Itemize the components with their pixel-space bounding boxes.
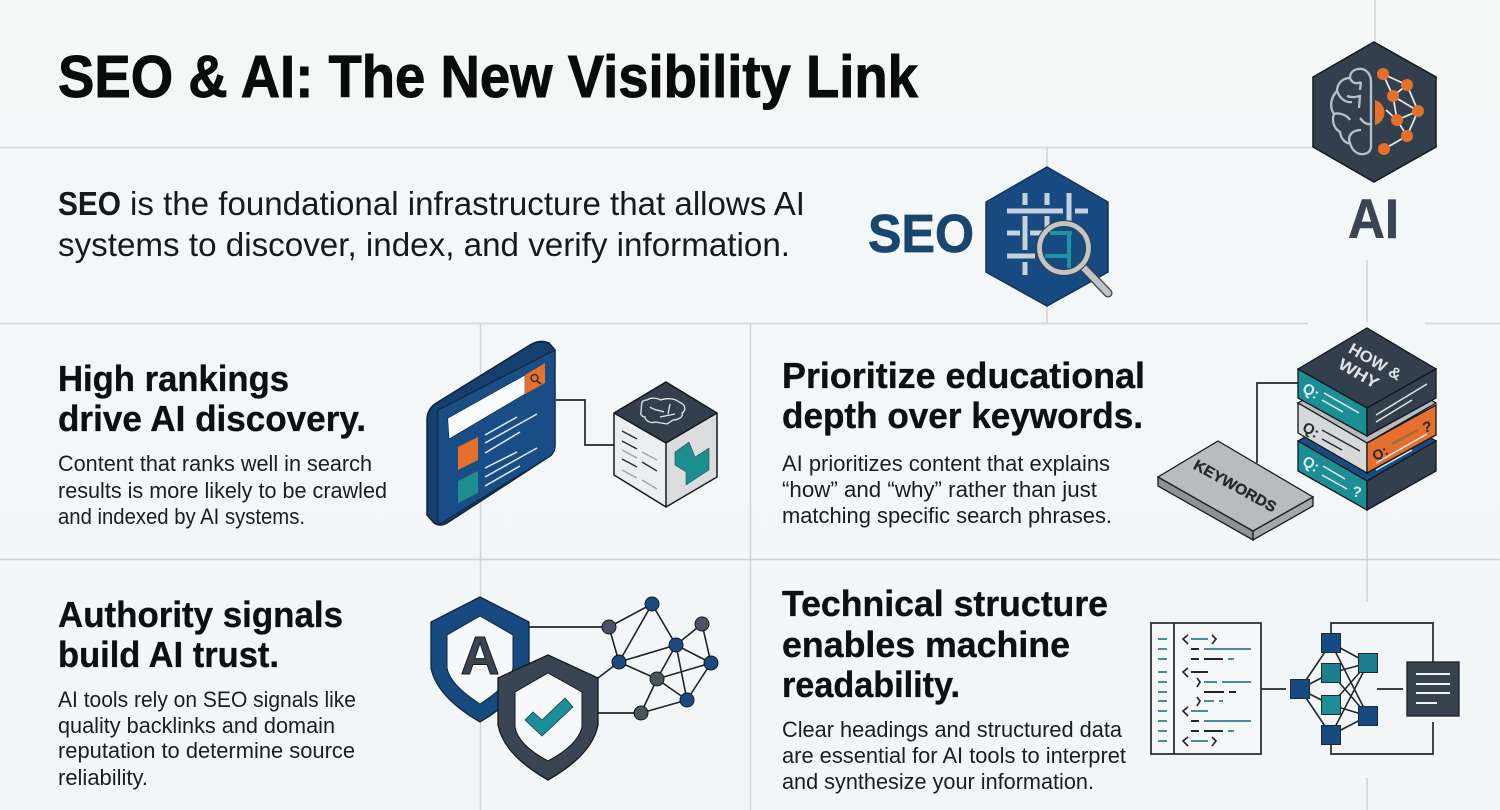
- text block: educational depth: [782, 451, 1112, 528]
- icon: output document: [1407, 662, 1459, 716]
- icon: question stack: ?: [1421, 418, 1433, 437]
- heading: educational depth: [782, 355, 1145, 436]
- AI label: AI: [1348, 187, 1399, 250]
- text block: authority signals: AI tools rely on SEO signals like: [58, 687, 356, 712]
- heading: technical structure: [782, 583, 1108, 705]
- text block: high rankings: results is more likely to be crawled: [58, 478, 387, 503]
- panel: high rankings: [58, 341, 717, 529]
- icon: question stack: Q:: [1299, 419, 1322, 442]
- icon: question stack: [1298, 328, 1436, 510]
- text block: definition: is the foundational infrastructure that allows AI: [130, 185, 805, 222]
- icon: check shield: [498, 655, 598, 780]
- text block: authority signals: reputation to determine source: [58, 738, 355, 763]
- heading: high rankings: [58, 358, 366, 439]
- heading: technical structure: Technical structure: [782, 583, 1108, 624]
- text block: high rankings: [58, 451, 387, 529]
- icon: keywords slab: KEYWORDS: [1190, 457, 1279, 516]
- text block: definition: [58, 185, 805, 263]
- icon: authority shield: A: [460, 626, 500, 686]
- heading: authority signals: [58, 594, 343, 675]
- icon: question stack: ?: [1351, 483, 1363, 502]
- icon: knowledge cube: [614, 382, 717, 507]
- panel: technical structure: [782, 583, 1459, 794]
- icon: question stack: Q:: [1299, 380, 1322, 403]
- icon: question stack: HOW &: [1345, 341, 1405, 385]
- text block: authority signals: [58, 687, 356, 790]
- text block: high rankings: and indexed by AI systems.: [58, 504, 305, 529]
- heading: authority signals: build AI trust.: [58, 634, 279, 675]
- icon: question stack: WHY: [1335, 356, 1382, 393]
- panel: AI badge: [1313, 42, 1436, 250]
- text block: educational depth: “how” and “why” rather than just: [782, 477, 1097, 502]
- title: SEO & AI: The New Visibility Link: [58, 44, 918, 110]
- text block: technical structure: are essential for AI tools to interpret: [782, 743, 1126, 768]
- text block: educational depth: AI prioritizes content that explains: [782, 451, 1110, 476]
- panel: authority signals: [58, 594, 718, 790]
- icon: question stack: Q:: [1299, 453, 1322, 476]
- text block: technical structure: Clear headings and structured data: [782, 717, 1123, 742]
- text block: definition: systems to discover, index, and verify information.: [58, 226, 790, 263]
- icon: AI brain hexagon: [1313, 42, 1436, 182]
- icon: SEO hexagon with magnifier: [986, 167, 1108, 306]
- connector: network frame: [1331, 623, 1433, 754]
- heading: high rankings: High rankings: [58, 358, 289, 399]
- heading: technical structure: readability.: [782, 664, 960, 705]
- panel: educational depth: [782, 328, 1436, 540]
- icon: authority shield: [431, 597, 529, 722]
- text block: definition: SEO: [58, 185, 121, 222]
- heading: educational depth: depth over keywords.: [782, 395, 1143, 436]
- icon: network graph: [602, 597, 718, 720]
- text block: authority signals: quality backlinks and domain: [58, 713, 335, 738]
- panel: SEO definition: [58, 167, 1108, 306]
- SEO label: SEO: [868, 204, 974, 264]
- connector: browser to cube: [556, 400, 614, 445]
- text block: high rankings: Content that ranks well in search: [58, 451, 372, 476]
- icon: question stack: Q:: [1369, 442, 1391, 464]
- icon: code document: [1151, 623, 1261, 754]
- text block: authority signals: reliability.: [58, 765, 148, 790]
- connectors: shields to network: [529, 627, 641, 713]
- text block: educational depth: matching specific search phrases.: [782, 503, 1112, 528]
- heading: technical structure: enables machine: [782, 624, 1070, 665]
- text block: technical structure: [782, 717, 1126, 794]
- text block: technical structure: and synthesize your information.: [782, 769, 1094, 794]
- icon: browser window: [427, 341, 555, 525]
- connector: keywords to stack: [1257, 383, 1298, 463]
- connector: code to network: [1261, 688, 1286, 690]
- heading: educational depth: Prioritize educational: [782, 355, 1145, 396]
- icon: neural network: [1290, 634, 1378, 744]
- icon: keywords slab: [1158, 441, 1313, 540]
- heading: authority signals: Authority signals: [58, 594, 343, 635]
- heading: high rankings: drive AI discovery.: [58, 398, 366, 439]
